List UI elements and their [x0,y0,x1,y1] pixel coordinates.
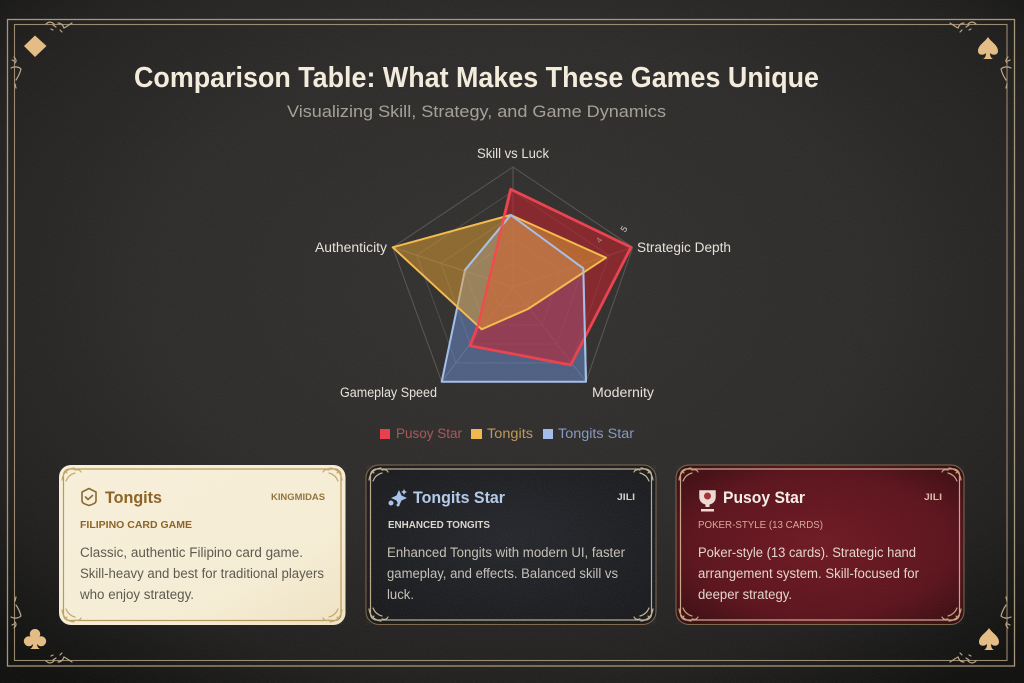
card body: luck. [387,587,414,602]
axis tick 4: 4 [594,235,605,245]
axis tick 5: 5 [618,224,630,234]
icon: spade suit top right [978,37,998,59]
axis label: Modernity: Modernity [592,385,654,400]
card body: arrangement system. Skill-focused for [698,566,919,581]
publisher: JILI [617,492,635,503]
card subtitle: FILIPINO CARD GAME [80,519,192,531]
panel: Pusoy Star card [676,465,964,624]
axis label: Strategic Depth: Strategic Depth [637,240,731,255]
panel: Tongits Star card [366,465,656,624]
series: Tongits [393,215,606,329]
card body: Classic, authentic Filipino card game. [80,545,303,560]
radar grid [393,167,633,382]
icon: club suit [24,629,46,649]
card subtitle: ENHANCED TONGITS [388,519,490,531]
series: Tongits Star [442,215,586,382]
card body: Enhanced Tongits with modern UI, faster [387,545,625,560]
panel: Tongits card [59,465,346,625]
axis label: Gameplay Speed: Gameplay Speed [340,385,437,400]
card body [698,545,919,602]
card title: Tongits Star [413,489,506,507]
card body [79,545,324,602]
card title: Pusoy Star [723,489,806,507]
series: Pusoy Star left outline [470,189,511,346]
legend: Tongits Star [558,426,635,441]
legend: Pusoy Star [396,426,463,441]
icon: diamond suit [24,36,46,57]
legend [380,426,635,441]
legend: Tongits [487,426,533,441]
publisher: JILI [924,492,942,503]
publisher: KINGMIDAS [271,492,325,503]
card title: Tongits [105,489,162,507]
series: Tongits Star upper outline [465,215,586,382]
axis label: Authenticity: Authenticity [315,240,387,255]
card body [387,545,625,602]
icon: trophy [700,491,715,512]
radar chart [315,146,731,400]
card subtitle: POKER-STYLE (13 CARDS) [698,519,823,531]
card body: gameplay, and effects. Balanced skill vs [387,566,618,581]
title: Comparison Table: What Makes These Games Unique [134,62,819,94]
card body: who enjoy strategy. [79,587,194,602]
icon: spade suit bottom right [979,628,999,650]
axis label: Skill vs Luck: Skill vs Luck [477,146,549,161]
icon: sparkles [388,489,407,506]
series: Pusoy Star [470,189,631,365]
subtitle: Visualizing Skill, Strategy, and Game Dynamics [287,102,666,121]
icon: shield check [82,488,96,506]
card body: Skill-heavy and best for traditional players [80,566,324,581]
card body: deeper strategy. [698,587,792,602]
card body: Poker-style (13 cards). Strategic hand [698,545,916,560]
